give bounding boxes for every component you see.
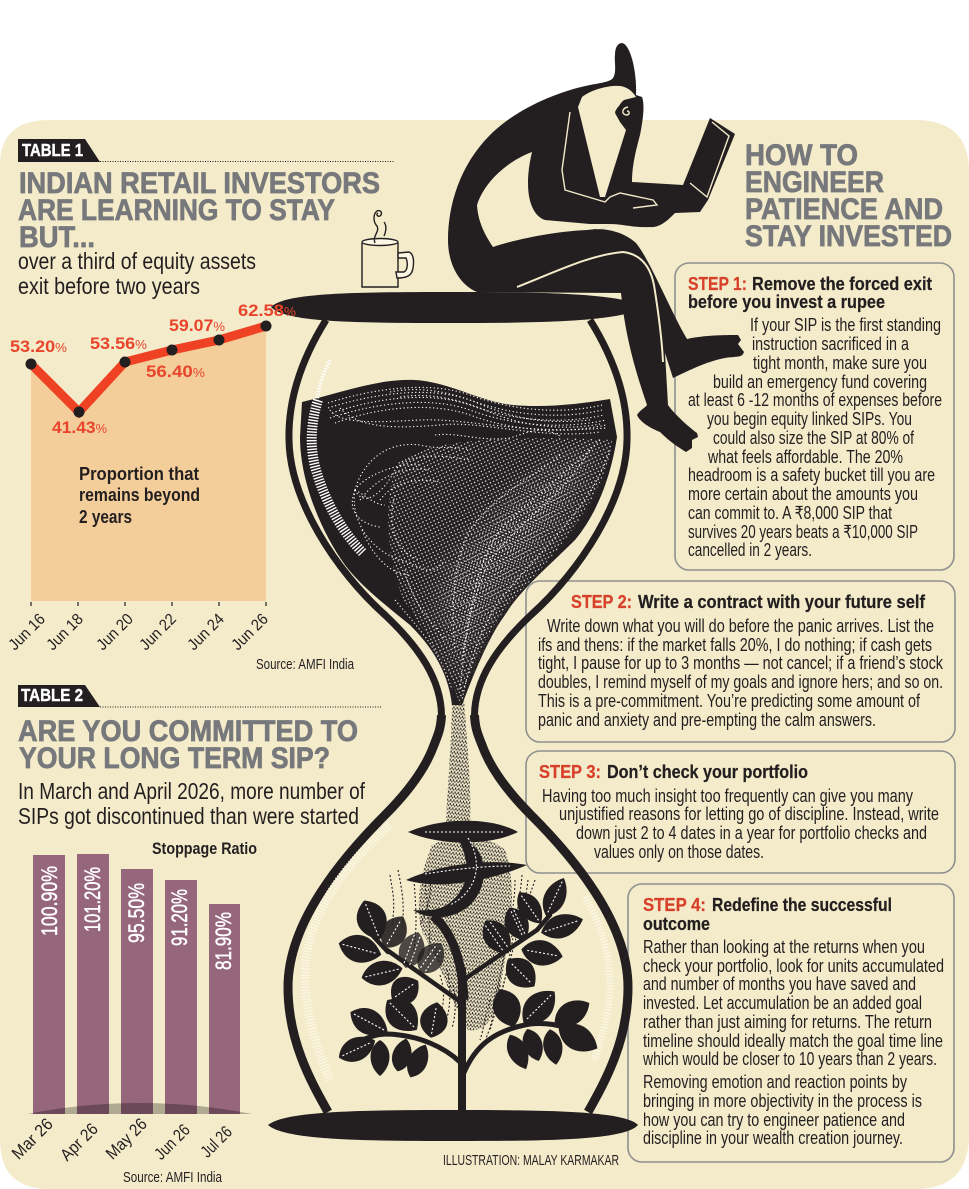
- chart area: [31, 326, 266, 601]
- subheading: table 2: In March and April 2026, more number of: [18, 778, 365, 804]
- falling sand stream: [390, 700, 535, 1040]
- text block: step 4: Removing emotion and reaction points by: [643, 1072, 907, 1092]
- heading: how to engineer patience: PATIENCE AND: [745, 193, 943, 226]
- bar value labels: 95.50%: [124, 883, 149, 943]
- text block: step 4: [642, 894, 944, 1148]
- text block: step 1: could also size the SIP at 80% of: [713, 428, 915, 448]
- bar x axis labels: [8, 1114, 236, 1165]
- text block: step 3: values only on those dates.: [594, 842, 764, 862]
- chart annotation: 2 years: [79, 506, 132, 527]
- chart value labels: [10, 301, 296, 437]
- chart x axis labels: [6, 611, 272, 654]
- chart value labels: 53.20%: [10, 337, 67, 356]
- bar x axis labels: Mar 26: [8, 1114, 57, 1163]
- source: table 1: Source: AMFI India: [256, 656, 355, 673]
- text block: step 1: you begin equity linked SIPs. You: [707, 409, 912, 429]
- chart value labels: 56.40 %: [146, 362, 205, 381]
- face glasses: [615, 100, 636, 125]
- sliver under forearm: [587, 224, 610, 230]
- text block: step 1: what feels affordable. The 20%: [707, 447, 903, 467]
- subheading: table 1: [18, 248, 256, 299]
- subheading: table 2: SIPs got discontinued than were started: [18, 803, 359, 829]
- bar value labels: [37, 866, 236, 970]
- chart value labels: 41.43%: [52, 418, 107, 437]
- text block: step 4: discipline in your wealth creation journey.: [643, 1128, 903, 1148]
- text block: step 4: how you can try to engineer patience and: [643, 1110, 905, 1130]
- heading: table 2: YOUR LONG TERM SIP?: [19, 742, 330, 775]
- hourglass glass outline upper: [288, 320, 628, 1112]
- bar base shadow: [27, 1103, 252, 1114]
- text block: step 4: outcome: [643, 913, 710, 934]
- chart x axis labels: Jun 26: [229, 611, 272, 654]
- text block: step 1: can commit to. A ₹8,000 SIP that: [688, 503, 892, 523]
- text block: step 2: Write a contract with your future self: [638, 591, 926, 612]
- text block: step 1: [688, 273, 942, 560]
- icon: rupee symbol: [406, 821, 527, 1000]
- text block: step 1: instruction sacrificed in a: [752, 334, 910, 354]
- heading: table 1: [18, 167, 380, 254]
- hatched highlight on upper glass: [312, 360, 363, 553]
- heading: how to engineer patience: HOW TO: [745, 139, 858, 172]
- tag: table 2: TABLE 2: [21, 685, 83, 705]
- bar x axis labels: Apr 26: [57, 1119, 102, 1165]
- text block: step 3: [539, 761, 939, 862]
- bar value labels: 91.20%: [167, 889, 192, 946]
- bars: [33, 854, 240, 1114]
- text block: step 2: panic and anxiety and pre-empting the calm answers.: [538, 710, 876, 730]
- heading: how to engineer patience: ENGINEER: [745, 166, 884, 199]
- bar value labels: 101.20%: [80, 867, 105, 932]
- panel: step 2 box: [526, 581, 955, 742]
- bar x axis labels: Jun 26: [151, 1120, 194, 1164]
- text block: step 3: STEP 3:: [539, 761, 601, 782]
- panel: step 1 box: [675, 263, 954, 570]
- bar x axis labels: Jul 26: [197, 1122, 236, 1161]
- white detail lines: [517, 112, 729, 362]
- panel: table 2 bar chart: [8, 685, 381, 1186]
- chart annotation: remains beyond: [79, 484, 200, 505]
- panel: step 3 box: [526, 751, 955, 873]
- text block: step 2: STEP 2:: [571, 591, 632, 612]
- lower glass highlights: [305, 825, 610, 1080]
- bar value labels: 100.90%: [37, 866, 62, 936]
- text block: step 4: STEP 4:: [643, 894, 706, 915]
- heading: table 2: [18, 715, 358, 775]
- icon: hourglass top plate: [271, 292, 645, 323]
- sand speckles: [328, 387, 620, 710]
- icon: plant leaves: [334, 874, 603, 1081]
- heading: table 1: BUT...: [19, 221, 95, 254]
- subheading: table 1: over a third of equity assets: [18, 248, 256, 274]
- credit: illustration: ILLUSTRATION: MALAY KARMAKAR: [443, 1152, 619, 1169]
- subheading: table 1: exit before two years: [18, 273, 200, 299]
- chart x axis labels: Jun 22: [137, 611, 180, 654]
- text block: step 1: more certain about the amounts you: [688, 484, 918, 504]
- text block: step 1: cancelled in 2 years.: [688, 540, 812, 560]
- chart title: Stoppage Ratio: [152, 839, 257, 858]
- bar value labels: 81.90%: [211, 912, 236, 970]
- text block: step 1: Remove the forced exit: [752, 273, 932, 294]
- chart x axis labels: Jun 18: [44, 611, 87, 654]
- chart annotation: [79, 463, 200, 527]
- panel: table 1 line chart: [6, 139, 394, 673]
- chart points: [26, 320, 272, 418]
- text block: step 1: before you invest a rupee: [688, 291, 885, 312]
- text block: step 1: tight month, make sure you: [753, 353, 927, 373]
- chart value labels: 62.58 %: [238, 301, 296, 320]
- arm gap: [477, 152, 590, 247]
- icon: sand in upper bulb: [300, 380, 620, 710]
- bar x axis labels: May 26: [102, 1114, 151, 1163]
- icon: coffee mug: [362, 211, 414, 287]
- icon: plant stems: [345, 915, 590, 1110]
- icon: hourglass bottom plate: [268, 1110, 638, 1141]
- text block: step 3: Don’t check your portfolio: [607, 761, 808, 782]
- chart x axis labels: Jun 24: [185, 611, 228, 654]
- face and shirt: [578, 86, 636, 197]
- heading: table 1: ARE LEARNING TO STAY: [18, 194, 335, 227]
- chart value labels: 59.07%: [169, 316, 225, 335]
- leaf veins: [342, 882, 579, 1056]
- icon: seated man reading laptop: [448, 43, 744, 452]
- panel: step 4 box: [628, 884, 954, 1162]
- subheading: table 2: [18, 778, 365, 829]
- chart x axis labels: Jun 20: [94, 611, 137, 654]
- chart value labels: 53.56%: [90, 334, 147, 353]
- source: table 2: Source: AMFI India: [123, 1169, 223, 1186]
- tag: table 1: TABLE 1: [22, 140, 83, 160]
- heading: table 1: INDIAN RETAIL INVESTORS: [19, 167, 380, 200]
- chart line: [31, 326, 266, 412]
- chart x axis labels: Jun 16: [6, 611, 49, 654]
- illustration: hourglass with person and plant: [268, 43, 744, 1141]
- heading: how to engineer patience: [745, 139, 952, 253]
- text block: step 4: Redefine the successful: [712, 894, 892, 915]
- text block: step 2: [538, 591, 944, 730]
- chart annotation: Proportion that: [79, 463, 199, 484]
- text block: step 1: STEP 1:: [688, 273, 747, 294]
- heading: table 2: ARE YOU COMMITTED TO: [18, 715, 358, 748]
